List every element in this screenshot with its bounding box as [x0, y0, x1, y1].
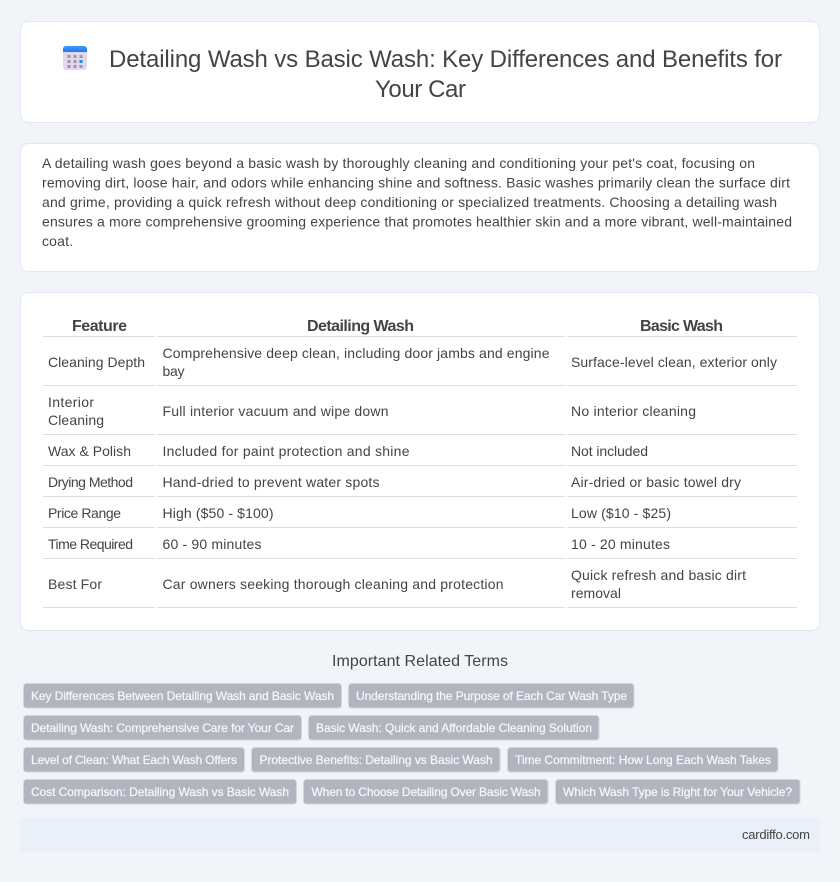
row: price range: Price Range: [48, 505, 121, 521]
related terms tags: Protective Benefits: Detailing vs Basic Wash: [260, 753, 492, 767]
row: interior cleaning: Cleaning: [48, 412, 104, 428]
row: drying method: Drying Method: [48, 474, 133, 490]
title: Detailing Wash vs Basic Wash: Key Differences and Benefits for: [109, 46, 782, 73]
row: best for: Car owners seeking thorough cleaning and protection: [162, 576, 504, 592]
row: cleaning depth: Surface-level clean, exterior only: [571, 354, 777, 370]
row: time required: 10 - 20 minutes: [571, 536, 670, 552]
row: best for: [48, 567, 746, 601]
related terms tags: When to Choose Detailing Over Basic Wash: [312, 785, 540, 799]
row: interior cleaning: Full interior vacuum and wipe down: [162, 403, 388, 419]
related terms tags: Basic Wash: Quick and Affordable Cleaning Solution: [316, 721, 592, 735]
panel: comparison table: [20, 292, 820, 630]
row: price range: [48, 505, 671, 521]
intro text: and grime, providing a quick refresh without deep conditioning or specialized treatments. Choosing a detailing wash: [42, 194, 777, 210]
intro text: [42, 155, 792, 249]
row: drying method: Hand-dried to prevent water spots: [162, 474, 380, 490]
related terms tags: Detailing Wash: Comprehensive Care for Your Car: [31, 721, 294, 735]
footer: [20, 818, 820, 852]
row: wax and polish: Included for paint protection and shine: [162, 443, 410, 459]
related terms tags: [24, 684, 800, 804]
related terms tags: Key Differences Between Detailing Wash and Basic Wash: [31, 689, 334, 703]
related terms tags: Which Wash Type is Right for Your Vehicle?: [563, 785, 792, 799]
row: interior cleaning: No interior cleaning: [571, 403, 696, 419]
row: wax and polish: Wax & Polish: [48, 443, 131, 459]
related terms tags: Level of Clean: What Each Wash Offers: [31, 753, 237, 767]
row: best for: removal: [571, 585, 621, 601]
row: interior cleaning: Interior: [48, 394, 94, 410]
row: best for: Quick refresh and basic dirt: [571, 567, 746, 583]
icon: calendar: [63, 46, 87, 70]
table header: Basic Wash: [640, 318, 723, 335]
panel: introduction: [20, 144, 820, 272]
row: time required: [48, 536, 670, 552]
row: best for: Best For: [48, 576, 102, 592]
intro text: A detailing wash goes beyond a basic wash by thoroughly cleaning and conditioning your pet's coat, focusing on: [42, 155, 755, 171]
panel: title: [20, 22, 820, 122]
row: cleaning depth: Comprehensive deep clean, including door jambs and engine: [162, 345, 550, 361]
row: wax and polish: [48, 443, 648, 459]
footer: cardiffo.com: [742, 827, 810, 842]
row: cleaning depth: bay: [162, 363, 184, 379]
row: cleaning depth: [48, 345, 777, 379]
row: time required: 60 - 90 minutes: [162, 536, 262, 552]
intro text: coat.: [42, 233, 73, 249]
row: cleaning depth: Cleaning Depth: [48, 354, 145, 370]
row: wax and polish: Not included: [571, 443, 648, 459]
related terms tags: Understanding the Purpose of Each Car Wash Type: [356, 689, 627, 703]
title: [109, 46, 782, 103]
intro text: ensures a more comprehensive grooming experience that promotes healthier skin and a more vibrant, well-maintained: [42, 214, 792, 230]
related terms tags: Cost Comparison: Detailing Wash vs Basic Wash: [31, 785, 289, 799]
heading: important related terms: Important Related Terms: [332, 653, 508, 670]
row: interior cleaning: [48, 394, 696, 428]
title: Your Car: [375, 76, 466, 103]
row: drying method: [48, 474, 741, 490]
related terms tags: Time Commitment: How Long Each Wash Takes: [515, 753, 771, 767]
row: price range: High ($50 - $100): [162, 505, 274, 521]
table header: Detailing Wash: [307, 318, 414, 335]
table header: [72, 318, 723, 335]
table header: Feature: [72, 318, 127, 335]
row: drying method: Air-dried or basic towel dry: [571, 474, 741, 490]
row: price range: Low ($10 - $25): [571, 505, 671, 521]
row: time required: Time Required: [48, 536, 133, 552]
intro text: removing dirt, loose hair, and odors while enhancing shine and softness. Basic washes primarily clean the surface dirt: [42, 174, 790, 190]
